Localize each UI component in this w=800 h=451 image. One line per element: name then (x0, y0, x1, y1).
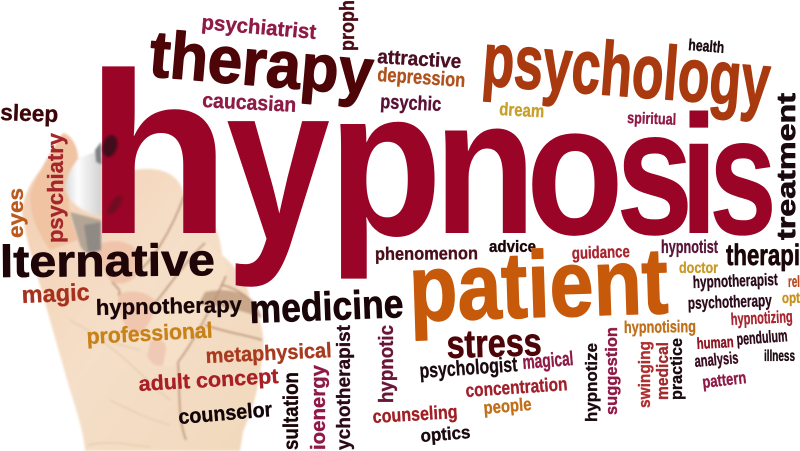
word: adult concept: adult concept (138, 365, 279, 396)
word: optics: optics (420, 422, 471, 446)
finger two (118, 291, 156, 334)
creases (112, 196, 262, 440)
word: attractive: attractive (377, 46, 462, 73)
word: patient: patient (407, 228, 670, 341)
word: analysis: analysis (694, 348, 739, 371)
word: medicine: medicine (249, 282, 404, 332)
word: human: human (696, 334, 734, 353)
word: psychologist: psychologist (419, 353, 518, 383)
word: hypnotize: hypnotize (582, 343, 601, 422)
word: psychiatrist: psychiatrist (201, 11, 317, 44)
word: medical: medical (653, 342, 672, 400)
word: spiritual: spiritual (627, 110, 676, 129)
word: psychic: psychic (380, 91, 442, 116)
word: bioenergy: ioenergy (308, 364, 330, 450)
icon: hand and fingers (22, 133, 264, 451)
word: swinging: swinging (635, 341, 654, 408)
word: alternative: lternative (0, 234, 215, 287)
word: professional: professional (86, 317, 213, 349)
word: practice: practice (667, 338, 686, 400)
title word: hypnosis: o (526, 64, 624, 274)
word: hypnotist: hypnotist (661, 237, 718, 257)
word: therapy: therapy (147, 16, 377, 109)
word: caucasian: caucasian (202, 89, 297, 117)
title word: hypnosis: n (434, 58, 536, 275)
icon: marker pen (65, 142, 102, 254)
icon: marker ink blob (100, 134, 125, 216)
title word: hypnosis: s (616, 72, 693, 273)
word: magic: magic (21, 279, 90, 309)
word: magical: magical (522, 348, 574, 374)
word: depression: depression (377, 64, 466, 92)
word: stress: stress (446, 321, 542, 367)
word: dream: dream (499, 99, 545, 121)
title word: hypnosis: p (328, 46, 442, 280)
word: people: people (483, 394, 532, 418)
title word: hypnosis (86, 26, 777, 288)
word: hypnotising: hypnotising (624, 317, 696, 337)
title word: hypnosis: h (86, 26, 230, 282)
word: phenomenon: phenomenon (375, 243, 478, 264)
title word: hypnosis: i (680, 80, 718, 269)
word: psychiatry: psychiatry (43, 132, 68, 243)
hand holding marker (22, 133, 264, 451)
word: health: health (688, 37, 725, 57)
word: pattern: pattern (701, 368, 747, 392)
word: suggestion: suggestion (602, 327, 621, 415)
word: counselor: counselor (177, 398, 273, 429)
word: doctor: doctor (679, 260, 718, 277)
word: metaphysical: metaphysical (205, 339, 332, 368)
title word: hypnosis: y (226, 37, 330, 288)
finger gap shadow (198, 290, 262, 318)
finger one (98, 241, 140, 284)
word: eyes: eyes (5, 188, 28, 238)
word: advice: advice (489, 237, 536, 256)
title word: hypnosis: s (709, 83, 777, 271)
word: hypnotherapy: hypnotherapy (96, 292, 243, 320)
word: hypnotic: hypnotic (376, 325, 398, 403)
word: concentration: concentration (465, 374, 568, 402)
word: psychotherapist: ychotherapist (334, 324, 355, 450)
word: sleep: sleep (0, 99, 59, 127)
word: counseling: counseling (372, 402, 458, 428)
word: guidance: guidance (571, 242, 630, 263)
word: consultation: sultation (280, 372, 303, 450)
finger three (146, 243, 226, 367)
